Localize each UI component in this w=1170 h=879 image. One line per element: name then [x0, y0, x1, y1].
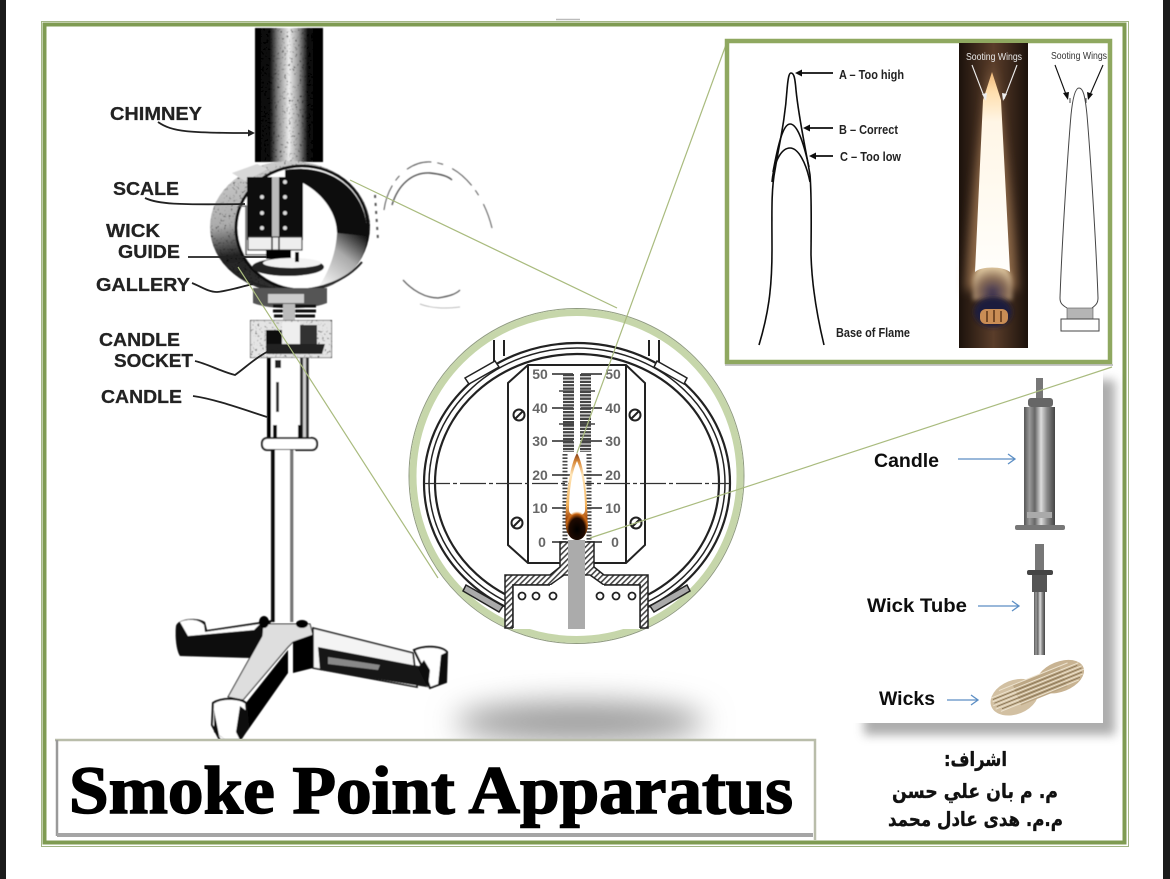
scale inside the window — [238, 177, 303, 255]
flame outline schematic — [1051, 50, 1107, 331]
wicks part — [879, 653, 1090, 722]
flame height labels and arrows: A – Too high — [839, 68, 904, 82]
flame height outlines — [759, 73, 824, 345]
component labels with leader lines — [96, 104, 287, 417]
label: candle socket: CANDLE — [99, 330, 180, 350]
scale numbers: 0 — [538, 534, 546, 550]
label: chimney — [110, 104, 255, 136]
panel: flame shapes — [725, 41, 1113, 365]
viewing window — [236, 166, 368, 290]
apparatus drawing — [176, 28, 492, 740]
scale numbers — [532, 366, 621, 550]
supervisors text: اشراف: — [944, 747, 1007, 771]
label: scale: SCALE — [113, 179, 179, 199]
title box: Smoke Point Apparatus — [69, 752, 793, 828]
scale numbers: 30 — [532, 433, 548, 449]
housing rings — [424, 340, 730, 623]
scale numbers: 0 — [611, 534, 619, 550]
collar and rod — [262, 425, 317, 622]
chimney — [255, 28, 323, 162]
label: candle socket — [99, 330, 287, 375]
scale numbers: 10 — [605, 500, 621, 516]
label: wick guide — [106, 221, 267, 262]
scale numbers: 20 — [532, 467, 548, 483]
label: candle — [101, 387, 267, 417]
graduated ticks — [552, 374, 602, 542]
flame photograph — [959, 43, 1028, 348]
flame height labels and arrows: B – Correct — [839, 123, 899, 137]
title box — [55, 739, 816, 840]
label: gallery: GALLERY — [96, 275, 190, 295]
wicks part: Wicks — [879, 688, 935, 710]
flame height labels and arrows — [795, 68, 910, 340]
flame outline schematic: Sooting Wings — [1051, 50, 1107, 62]
wick tube part — [867, 544, 1053, 655]
scale numbers: 20 — [605, 467, 621, 483]
lower neck, thread and socket — [250, 288, 332, 358]
flame photograph: Sooting Wings — [966, 51, 1022, 63]
housing bottom mounts — [463, 585, 690, 612]
label: candle socket: SOCKET — [114, 351, 193, 371]
lantern door ring — [375, 162, 492, 308]
supervisors text — [888, 747, 1063, 831]
flame height labels and arrows: C – Too low — [840, 150, 901, 164]
label: chimney: CHIMNEY — [110, 104, 202, 124]
magnified circle: scale and flame — [409, 308, 744, 644]
supervisors text: م.م. هدى عادل محمد — [888, 807, 1063, 831]
scale numbers: 10 — [532, 500, 548, 516]
scale plate — [508, 365, 645, 563]
candle part: Candle — [874, 450, 939, 472]
wick — [568, 540, 585, 629]
label: wick guide: GUIDE — [118, 242, 180, 262]
candle part — [874, 378, 1065, 530]
small flame — [566, 453, 588, 540]
label: candle: CANDLE — [101, 387, 182, 407]
wick tube part: Wick Tube — [867, 595, 967, 617]
label: gallery — [96, 275, 253, 295]
scale numbers: 40 — [532, 400, 548, 416]
supervisors text: م. م بان علي حسن — [892, 779, 1058, 804]
flame height labels and arrows: Base of Flame — [836, 326, 910, 340]
centre line — [424, 482, 730, 484]
candle tube — [267, 358, 310, 438]
scale numbers: 50 — [605, 366, 621, 382]
scale numbers: 40 — [605, 400, 621, 416]
scale numbers: 50 — [532, 366, 548, 382]
gallery — [232, 250, 362, 290]
lamp housing — [210, 161, 370, 293]
panel: candle parts — [852, 368, 1115, 735]
green zoom guide lines — [238, 42, 727, 578]
housing chevron highlight — [232, 164, 268, 181]
label: scale — [113, 179, 245, 204]
zoom guide line to candle panel — [590, 367, 1112, 538]
tripod base — [176, 616, 447, 740]
label: wick guide: WICK — [106, 221, 160, 241]
screws — [512, 410, 642, 528]
burner housing — [505, 542, 648, 629]
scale numbers: 30 — [605, 433, 621, 449]
soft floor shadow — [455, 702, 705, 742]
